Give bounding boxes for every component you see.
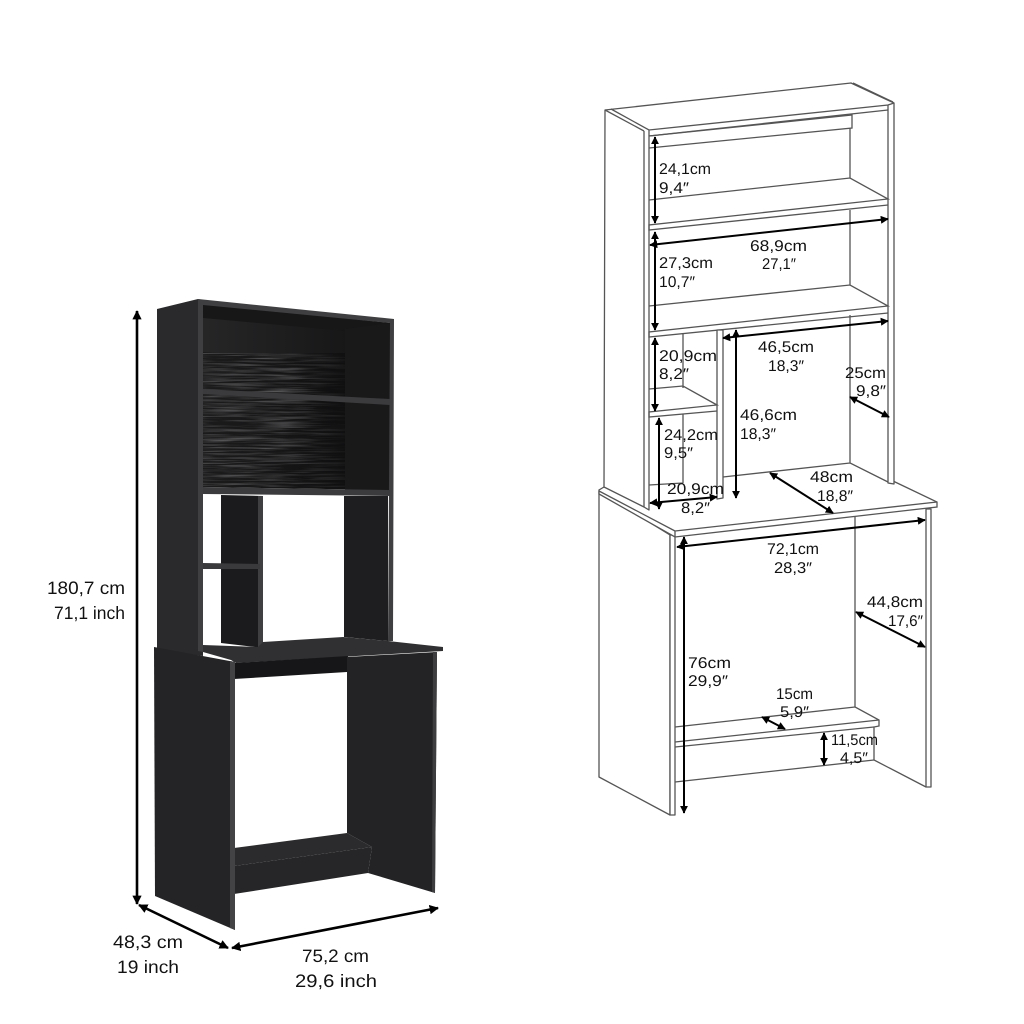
dimension: overall width xyxy=(232,908,438,991)
dimension: 72,1cm desk inner width: 72,1cm xyxy=(767,541,819,558)
dimension: 25cm hutch depth: 25cm xyxy=(845,365,886,382)
dimension: 24,2cm lower cubby height: 9,5″ xyxy=(664,445,694,462)
dimension: overall depth: 19 inch xyxy=(117,957,179,977)
dimension: 24,1cm upper shelf height xyxy=(655,137,711,223)
dimension: 46,6cm opening height xyxy=(736,330,797,498)
dimension: 46,6cm opening height: 46,6cm xyxy=(740,407,797,424)
dimension: 24,1cm upper shelf height: 9,4″ xyxy=(659,180,690,197)
dimension: 68,9cm inner width: 27,1″ xyxy=(762,256,796,273)
dimension: 24,2cm lower cubby height xyxy=(659,418,718,509)
dimension: overall height: 71,1 inch xyxy=(54,603,125,623)
dimension: 20,9cm cubby width: 8,2″ xyxy=(681,500,711,517)
dimension: 44,8cm leg panel depth: 44,8cm xyxy=(867,594,923,611)
dimension: 11,5cm lower panel height: 11,5cm xyxy=(831,732,878,749)
dimension: 20,9cm cubby height: 20,9cm xyxy=(659,348,717,365)
dimension: 20,9cm cubby width: 20,9cm xyxy=(667,481,724,498)
dimension: 46,5cm opening width: 46,5cm xyxy=(758,339,814,356)
dimension: overall depth: 48,3 cm xyxy=(113,932,183,952)
dimension: 25cm hutch depth: 9,8″ xyxy=(856,383,887,400)
hutch front edges xyxy=(198,299,394,652)
dimension: 76cm desk height xyxy=(684,537,731,813)
dimension: 24,2cm lower cubby height: 24,2cm xyxy=(664,427,718,444)
dimension: 20,9cm cubby height: 8,2″ xyxy=(659,366,690,383)
dimension: overall width: 29,6 inch xyxy=(295,971,377,991)
dimension: 20,9cm cubby width xyxy=(650,481,724,517)
black desk with hutch xyxy=(154,299,443,930)
dimension: overall height xyxy=(47,311,137,904)
dimension: 48cm desk top depth xyxy=(770,469,854,513)
dimension: 48cm desk top depth: 48cm xyxy=(810,469,853,486)
dimension: 11,5cm lower panel height xyxy=(824,732,878,767)
dimension: 76cm desk height: 76cm xyxy=(688,655,731,672)
line drawing of desk with hutch xyxy=(599,83,937,815)
hutch right lower panel xyxy=(344,496,388,641)
dimension: 72,1cm desk inner width: 28,3″ xyxy=(774,560,813,577)
dimension: 25cm hutch depth xyxy=(845,365,889,417)
desk apron xyxy=(234,656,348,679)
dimension: 24,1cm upper shelf height: 24,1cm xyxy=(659,161,711,178)
dimension: 68,9cm inner width xyxy=(650,219,888,273)
dimension: 20,9cm cubby height xyxy=(655,338,717,411)
desk outline xyxy=(599,481,937,815)
hutch left side panel xyxy=(157,299,203,656)
dimension: 44,8cm leg panel depth xyxy=(856,594,925,647)
dimension: 15cm lower shelf depth xyxy=(762,686,813,729)
desk right panel xyxy=(347,652,437,893)
dimension: 76cm desk height: 29,9″ xyxy=(688,673,729,690)
dimension: 68,9cm inner width: 68,9cm xyxy=(750,238,807,255)
desk top xyxy=(203,637,443,663)
dimension: overall width: 75,2 cm xyxy=(302,946,369,966)
desk lower shelf xyxy=(234,833,372,894)
dimension: 15cm lower shelf depth: 5,9″ xyxy=(780,704,810,721)
hutch middle divider xyxy=(203,495,263,648)
dimension: 48cm desk top depth: 18,8″ xyxy=(817,488,854,505)
dimension: 44,8cm leg panel depth: 17,6″ xyxy=(888,613,924,630)
dimension: 15cm lower shelf depth: 15cm xyxy=(776,686,813,703)
desk left side panel xyxy=(154,647,235,930)
dimension: 27,3cm middle shelf height: 27,3cm xyxy=(659,255,713,272)
dimension: 72,1cm desk inner width xyxy=(677,520,925,577)
dimension: overall depth xyxy=(113,905,228,977)
dimension: 46,5cm opening width xyxy=(723,321,888,375)
dimension: 27,3cm middle shelf height: 10,7″ xyxy=(659,274,696,291)
dimension: 46,6cm opening height: 18,3″ xyxy=(740,426,777,443)
hutch outline xyxy=(604,83,894,510)
hutch back panel xyxy=(203,303,390,490)
dimension: 11,5cm lower panel height: 4,5″ xyxy=(840,750,869,767)
dimension: 27,3cm middle shelf height xyxy=(655,232,713,330)
dimension: 46,5cm opening width: 18,3″ xyxy=(768,358,805,375)
dimension: overall height: 180,7 cm xyxy=(47,578,125,598)
